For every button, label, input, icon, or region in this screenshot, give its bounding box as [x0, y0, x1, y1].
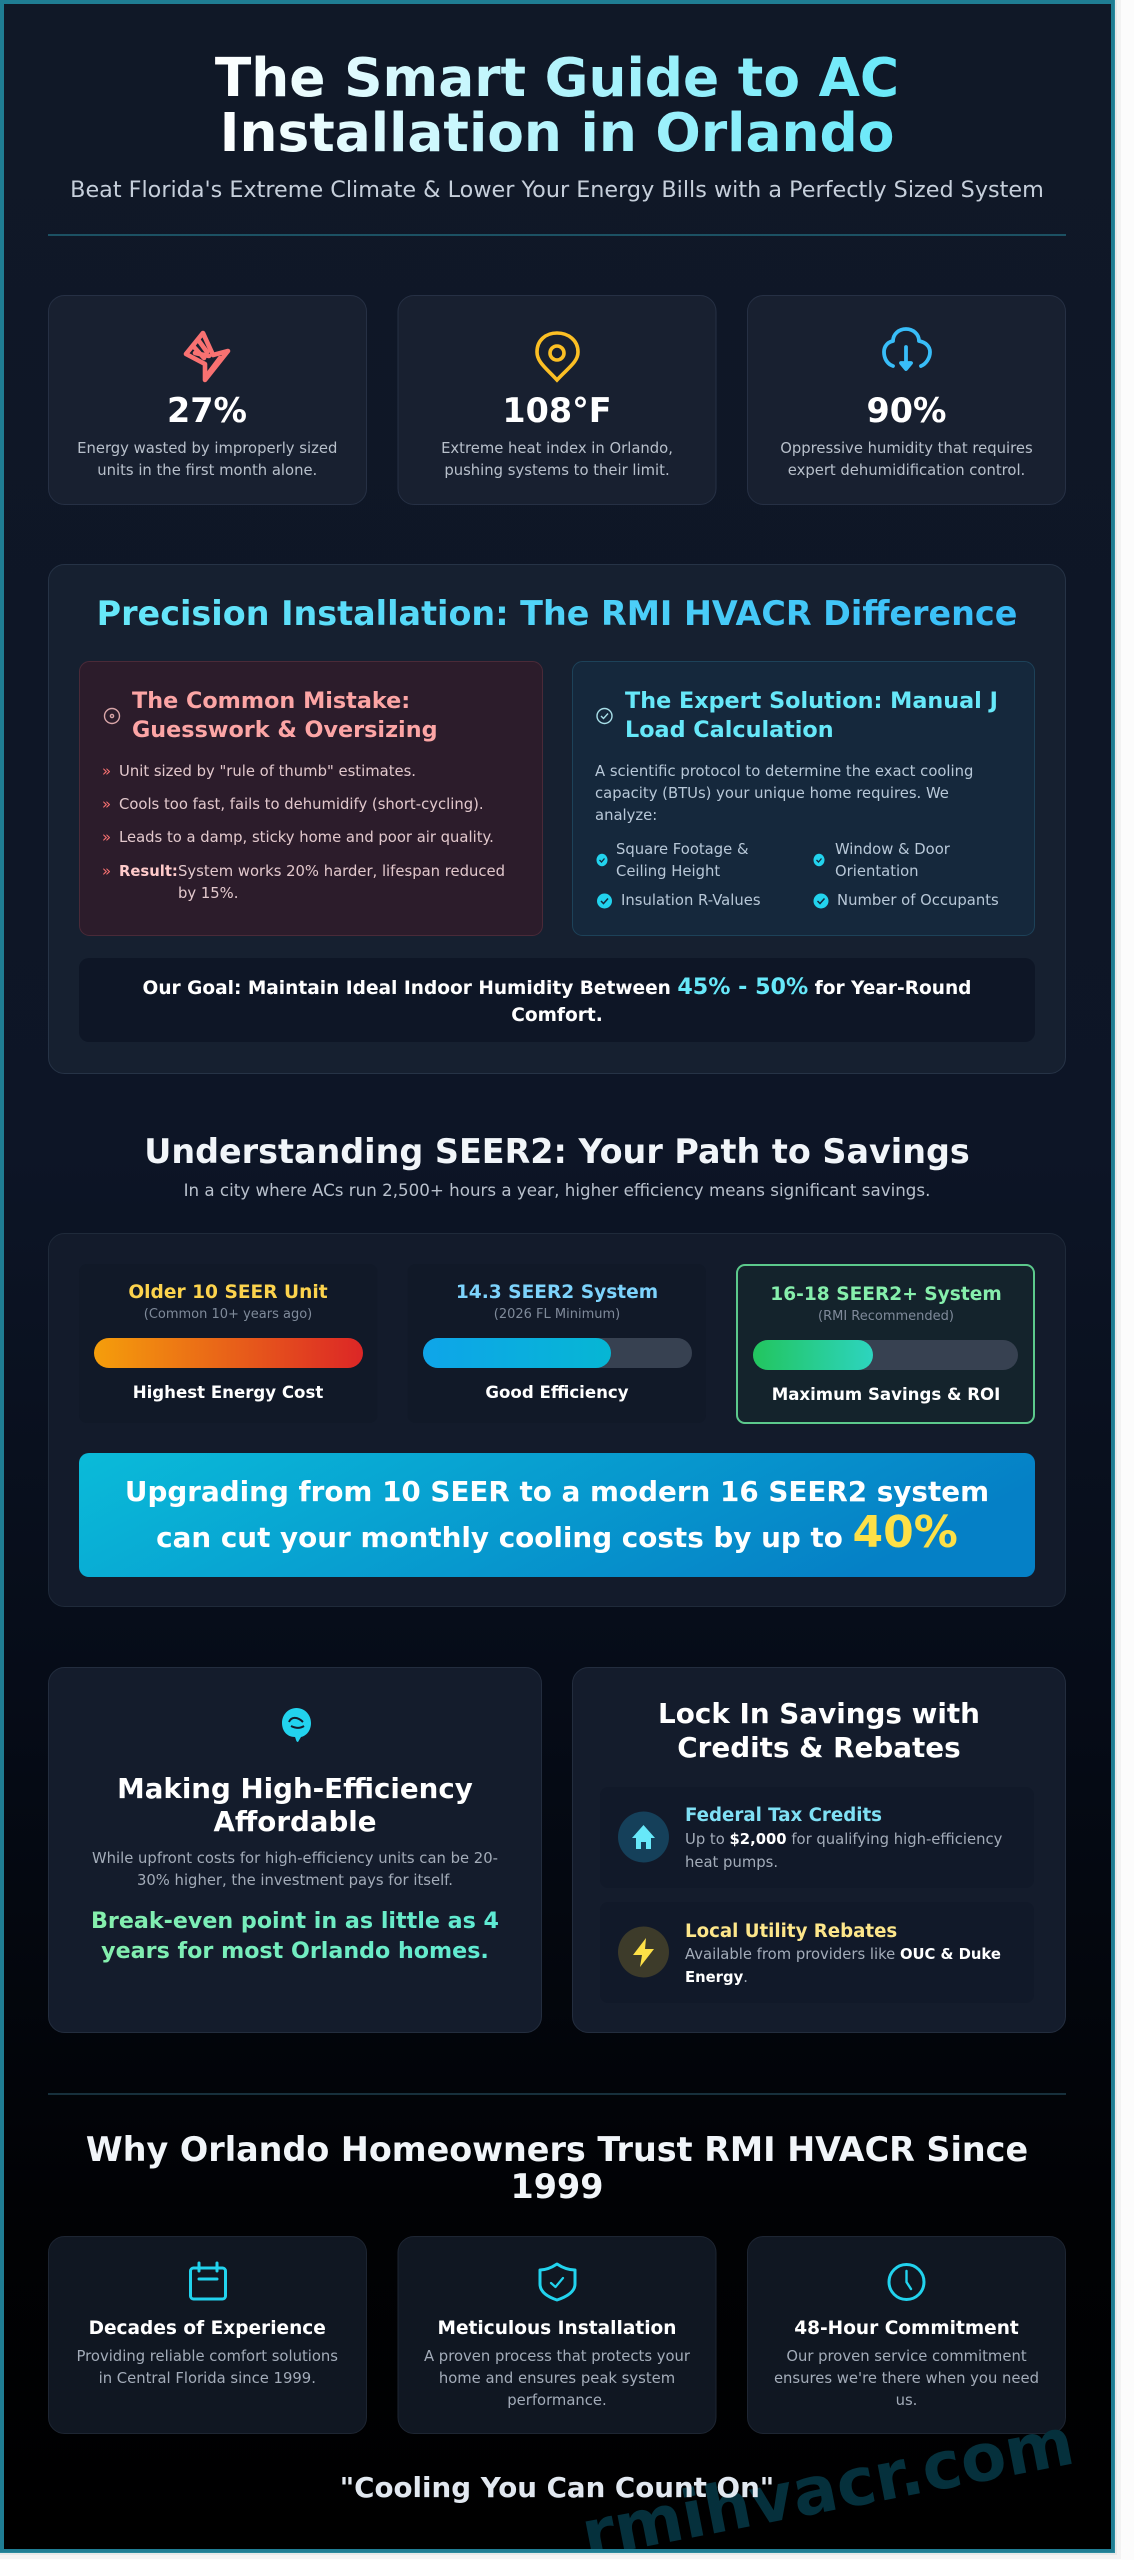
icon: calendar — [190, 2263, 226, 2299]
card: federal tax credits: Up to $2,000 for qualifying high-efficiency — [685, 1831, 1003, 1848]
text: SEER2 intro: In a city where ACs run 2,500+ hours a year, higher efficiency means significant savings. — [184, 1180, 930, 1200]
icon: shield check — [540, 2264, 575, 2300]
panel: 48-hour commitment — [748, 2236, 1066, 2434]
card: local utility rebates: Local Utility Rebates — [685, 1921, 897, 1942]
callout: break-even — [91, 1908, 499, 1964]
icon: lightning bolt — [186, 333, 228, 380]
list: load calculation factors — [596, 841, 999, 909]
card: 14.3 SEER2: (2026 FL Minimum) — [494, 1307, 620, 1322]
panel: stat humidity: expert dehumidification control. — [788, 462, 1025, 479]
panel: the expert solution: Load Calculation — [625, 717, 834, 743]
card: federal tax credits — [600, 1787, 1034, 1888]
list: mistake bullets: » — [102, 829, 111, 846]
list: load calculation factors: Orientation — [835, 863, 919, 880]
card: older 10 SEER: Highest Energy Cost — [133, 1383, 323, 1402]
panel: stat humidity: 90% — [867, 391, 946, 430]
panel: decades of experience — [48, 2236, 366, 2434]
heading: understanding SEER2: Understanding SEER2: Your Path to Savings — [144, 1132, 970, 1171]
callout: break-even: Break-even point in as little as 4 — [91, 1908, 499, 1934]
panel: stat humidity: Oppressive humidity that requires — [780, 440, 1033, 457]
list: load calculation factors: Number of Occupants — [837, 892, 999, 909]
panel: credits and rebates: Credits & Rebates — [677, 1731, 961, 1764]
card: older 10 SEER — [79, 1264, 378, 1423]
panel: credits and rebates: Lock In Savings with — [658, 1697, 980, 1730]
panel: decades of experience: Providing reliable comfort solutions — [76, 2348, 338, 2365]
list: mistake bullets: » — [102, 796, 111, 813]
card: 14.3 SEER2 — [408, 1264, 706, 1423]
callout: humidity goal: Our Goal: Maintain Ideal Indoor Humidity Between 45% - 50% for Year-Round — [143, 974, 971, 1000]
list: mistake bullets: Leads to a damp, sticky home and poor air quality. — [119, 829, 494, 846]
list: mistake bullets: System works 20% harder, lifespan reduced — [178, 863, 505, 880]
panel: stat energy wasted: 27% — [167, 391, 247, 430]
card: federal tax credits: heat pumps. — [685, 1854, 778, 1871]
panel: the common mistake — [80, 662, 542, 936]
icon: target circle — [104, 708, 120, 724]
card: federal tax credits: Federal Tax Credits — [685, 1805, 882, 1826]
subtitle: Beat Florida's Extreme Climate & Lower Your Energy Bills with a Perfectly Sized System — [70, 177, 1044, 203]
list: mistake bullets — [102, 763, 505, 902]
panel: 48-hour commitment: Our proven service commitment — [786, 2348, 1027, 2365]
panel: stat energy wasted: Energy wasted by improperly sized — [77, 440, 337, 457]
title: The Smart Guide to AC — [215, 46, 899, 109]
panel: stat humidity — [748, 296, 1066, 504]
panel: stat heat index: 108°F — [502, 391, 612, 430]
card: 16-18 SEER2+ recommended: (RMI Recommended) — [818, 1309, 954, 1324]
heading: precision installation: Precision Installation: The RMI HVACR Difference — [97, 594, 1017, 633]
panel: decades of experience: in Central Florida since 1999. — [99, 2370, 316, 2387]
card: local utility rebates: Available from providers like OUC & Duke — [685, 1946, 1001, 1963]
heading: why trust RMI: Why Orlando Homeowners Trust RMI HVACR Since — [86, 2130, 1028, 2169]
callout: 40 percent savings: Upgrading from 10 SEER to a modern 16 SEER2 system — [125, 1475, 989, 1508]
bar: minimum system — [423, 1338, 692, 1368]
title: Installation in Orlando — [220, 101, 894, 164]
icon: piggy blob — [282, 1708, 311, 1742]
list: mistake bullets: » — [102, 863, 111, 880]
callout: break-even: years for most Orlando homes. — [101, 1938, 489, 1964]
panel: meticulous installation — [398, 2236, 716, 2434]
panel: 48-hour commitment: 48-Hour Commitment — [794, 2318, 1019, 2339]
panel: meticulous installation: performance. — [507, 2392, 607, 2409]
tagline: "Cooling You Can Count On" — [340, 2471, 774, 2504]
callout: 40 percent savings: can cut your monthly cooling costs by up to 40% — [156, 1507, 958, 1558]
icon: lightning — [618, 1926, 669, 1978]
icon: map pin — [537, 333, 578, 380]
panel: stat energy wasted — [48, 296, 366, 504]
callout: humidity goal — [79, 958, 1035, 1042]
card: 16-18 SEER2+ recommended — [737, 1265, 1034, 1423]
panel: making high-efficiency affordable: Affordable — [213, 1805, 377, 1838]
icon: house — [618, 1812, 669, 1862]
panel: meticulous installation: A proven process that protects your — [424, 2348, 691, 2365]
icon: check circle — [597, 708, 612, 724]
panel: 48-hour commitment: us. — [896, 2392, 917, 2409]
card: 16-18 SEER2+ recommended: Maximum Savings & ROI — [772, 1385, 1000, 1404]
card: older 10 SEER: Older 10 SEER Unit — [128, 1282, 328, 1303]
icon: clock — [889, 2264, 924, 2300]
panel: stat energy wasted: units in the first month alone. — [97, 462, 317, 479]
panel: the expert solution: A scientific protocol to determine the exact cooling — [595, 763, 973, 780]
panel: meticulous installation: home and ensures peak system — [439, 2370, 675, 2387]
panel: credits and rebates — [572, 1668, 1066, 2032]
panel: making high-efficiency affordable: Making High-Efficiency — [117, 1772, 473, 1805]
bar: recommended system — [753, 1340, 1018, 1370]
panel: the expert solution: capacity (BTUs) your unique home requires. We — [595, 785, 949, 802]
list: mistake bullets: Result: — [119, 863, 178, 880]
list: load calculation factors: Square Footage & — [616, 841, 749, 858]
panel: SEER comparison — [48, 1234, 1066, 1606]
panel: 48-hour commitment: ensures we're there when you need — [774, 2370, 1039, 2387]
list: mistake bullets: » — [102, 763, 111, 780]
panel: the common mistake: The Common Mistake: — [132, 688, 410, 714]
panel: stat heat index: pushing systems to their limit. — [444, 462, 670, 479]
panel: making high-efficiency affordable — [48, 1668, 542, 2032]
panel: precision installation — [48, 564, 1066, 1074]
card: 16-18 SEER2+ recommended: 16-18 SEER2+ System — [770, 1284, 1002, 1305]
panel: the expert solution — [572, 662, 1034, 936]
list: mistake bullets: Cools too fast, fails to dehumidify (short-cycling). — [119, 796, 484, 813]
panel: decades of experience: Decades of Experience — [89, 2318, 326, 2339]
list: load calculation factors: Window & Door — [835, 841, 951, 858]
panel: making high-efficiency affordable: 30% higher, the investment pays for itself. — [137, 1872, 453, 1889]
heading: why trust RMI: 1999 — [511, 2167, 603, 2206]
panel: meticulous installation: Meticulous Installation — [438, 2318, 676, 2339]
list: mistake bullets: by 15%. — [178, 885, 238, 902]
callout: humidity goal: Comfort. — [511, 1005, 603, 1026]
bar: older unit — [94, 1338, 363, 1368]
list: load calculation factors: Insulation R-Values — [621, 892, 761, 909]
panel: making high-efficiency affordable: While upfront costs for high-efficiency units can be 20- — [92, 1850, 498, 1867]
card: older 10 SEER: (Common 10+ years ago) — [144, 1307, 312, 1322]
panel: the common mistake: Guesswork & Oversizing — [132, 717, 438, 743]
list: mistake bullets: Unit sized by "rule of thumb" estimates. — [119, 763, 416, 780]
list: load calculation factors: Ceiling Height — [616, 863, 720, 880]
icon: cloud with arrow — [884, 329, 930, 369]
heading: why trust RMI — [86, 2130, 1028, 2206]
card: local utility rebates — [600, 1902, 1034, 2003]
panel: stat heat index — [398, 296, 716, 504]
panel: the expert solution: analyze: — [595, 807, 657, 824]
panel: the expert solution: The Expert Solution: Manual J — [625, 688, 998, 714]
title — [215, 46, 899, 164]
card: 14.3 SEER2: Good Efficiency — [485, 1383, 629, 1402]
card: local utility rebates: Energy. — [685, 1969, 748, 1986]
panel: stat heat index: Extreme heat index in Orlando, — [441, 440, 673, 457]
callout: 40 percent savings — [79, 1453, 1035, 1577]
card: 14.3 SEER2: 14.3 SEER2 System — [456, 1282, 658, 1303]
